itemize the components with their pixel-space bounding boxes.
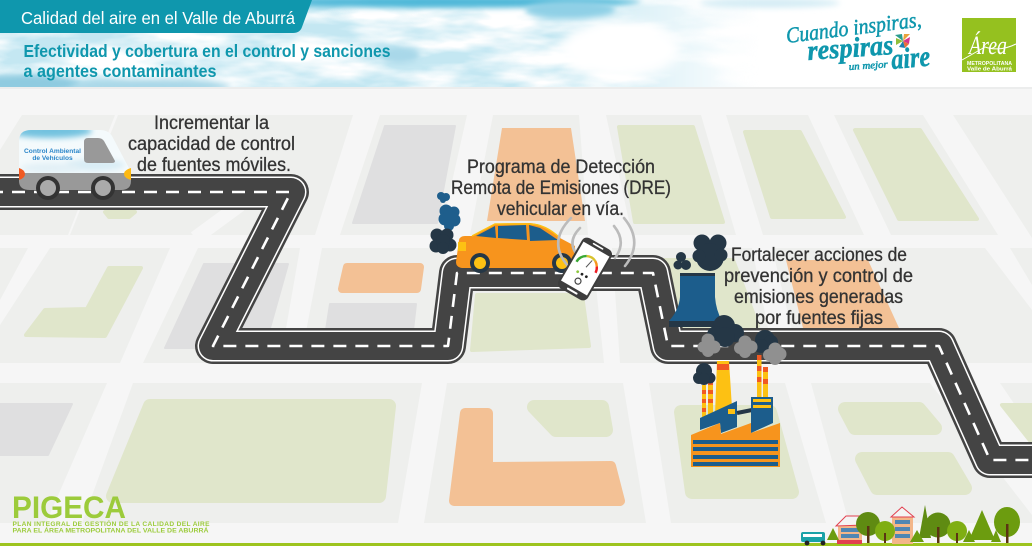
icon: cooling tower (669, 234, 728, 327)
chimneys (702, 355, 768, 418)
label: mobile sources (128, 112, 295, 176)
logo: Area Metropolitana: METROPOLITANA (967, 61, 1013, 67)
map lots: orange (342, 128, 899, 501)
bottom green bar (0, 543, 1032, 546)
icon: building right (891, 507, 914, 544)
label: mobile sources: capacidad de control (128, 133, 295, 155)
icon: bus (801, 532, 825, 545)
map lots: green (26, 127, 1032, 443)
PIGECA logo: PIGECA (12, 489, 126, 525)
subtitle: Efectividad y cobertura en el control y sanciones (24, 41, 391, 61)
slogan: aire (890, 41, 932, 76)
tower smoke (674, 234, 728, 271)
icon: building left (836, 516, 864, 544)
label: DRE programme (451, 156, 671, 220)
PIGECA logo: PARA EL ÁREA METROPOLITANA DEL VALLE DE ABURRÁ (12, 526, 209, 534)
label: fixed sources: prevención y control de (724, 265, 913, 287)
orange building (691, 423, 780, 467)
PIGECA logo: PLAN INTEGRAL DE GESTIÓN DE LA CALIDAD DEL AIRE (12, 519, 210, 528)
van lettering: de Vehículos (32, 155, 73, 162)
label: DRE programme: Remota de Emisiones (DRE) (451, 177, 671, 199)
logo: Area Metropolitana: Área (967, 31, 1007, 60)
icon: trees (827, 505, 1020, 543)
icon: phone with gauge (556, 235, 614, 303)
title: Calidad del aire en el Valle de Aburrá (21, 8, 295, 28)
label: mobile sources: Incrementar la (154, 112, 269, 134)
bottom scenery (801, 505, 1020, 545)
icon: car exhaust smoke (430, 192, 460, 254)
slogan: respiras (806, 30, 894, 67)
slogan: Cuando inspiras, (785, 7, 923, 48)
PIGECA logo (12, 489, 210, 534)
title banner (0, 0, 312, 33)
logo: Area Metropolitana: Valle de Aburrá (967, 66, 1013, 72)
label: fixed sources: emisiones generadas (734, 286, 903, 308)
label: mobile sources: de fuentes móviles. (137, 154, 291, 176)
sky header with clouds (0, 0, 1032, 93)
subtitle (24, 41, 391, 81)
blue halls (700, 401, 737, 433)
icon: van (19, 130, 131, 200)
road smoke clouds (698, 315, 786, 365)
van lettering (24, 148, 81, 162)
map lots: grey (0, 126, 455, 455)
label: fixed sources (724, 244, 913, 329)
van lettering: Control Ambiental (24, 148, 81, 155)
logo: Area Metropolitana (962, 18, 1016, 72)
slogan: un mejor (848, 59, 888, 73)
slogan (785, 7, 932, 76)
road (0, 192, 1032, 460)
label: DRE programme: Programa de Detección (467, 156, 655, 178)
icon: pinwheel (895, 34, 910, 48)
factory smoke left (693, 363, 716, 385)
label: fixed sources: por fuentes fijas (755, 307, 883, 329)
label: DRE programme: vehicular en vía. (497, 198, 624, 220)
icon: factory (691, 355, 780, 467)
icon: car (456, 223, 575, 273)
subtitle: a agentes contaminantes (24, 61, 217, 81)
icon: signal waves (558, 218, 634, 266)
label: fixed sources: Fortalecer acciones de (731, 244, 907, 266)
header edge (0, 87, 1032, 89)
map lots: large rounded green (113, 406, 965, 496)
